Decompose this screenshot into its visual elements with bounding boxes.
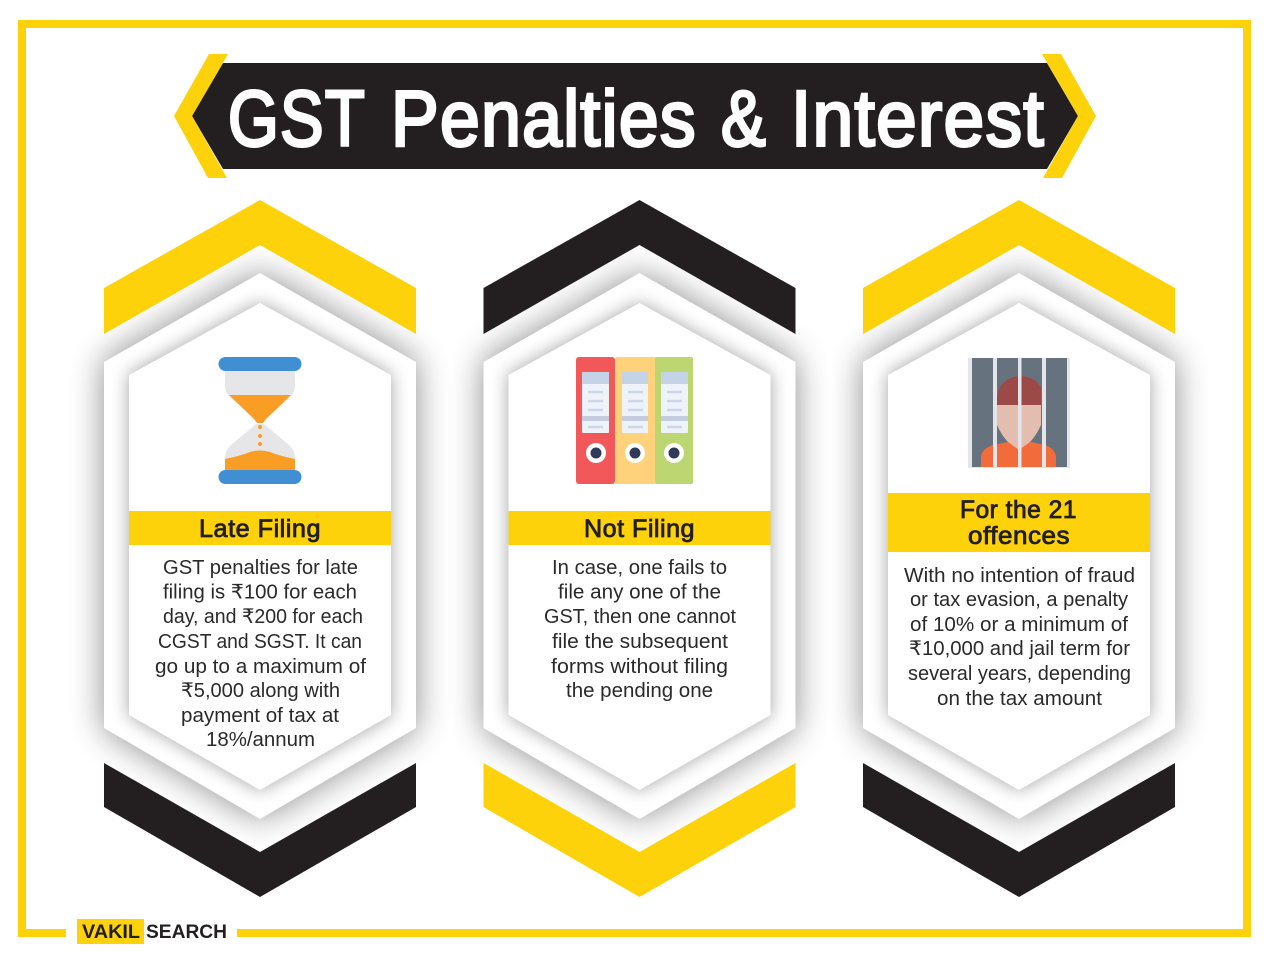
text block: on the tax amount — [937, 688, 1102, 710]
text block: forms without filing — [551, 656, 728, 678]
title: GST — [228, 74, 366, 162]
icon: binders — [576, 357, 693, 484]
logo: vakil search: SEARCH — [146, 922, 227, 943]
text block: filing is ₹100 for each — [163, 582, 357, 604]
heading: For the 21 — [960, 496, 1077, 524]
heading band — [508, 511, 770, 545]
logo: vakil search: VAKIL — [82, 922, 140, 943]
text block: day, and ₹200 for each — [163, 606, 363, 628]
panel: 21 offences — [863, 200, 1175, 897]
text block: payment of tax at — [181, 705, 339, 727]
title banner — [174, 54, 1096, 178]
heading band — [129, 511, 391, 545]
text block: GST penalties for late — [163, 557, 358, 579]
heading: Not Filing — [584, 515, 695, 543]
text block: several years, depending — [908, 663, 1131, 685]
text block: the pending one — [566, 680, 713, 702]
icon: hourglass — [218, 357, 302, 484]
logo: vakil search — [77, 919, 227, 944]
text block: file any one of the — [558, 582, 721, 604]
icon: prisoner behind bars — [968, 358, 1070, 468]
text block — [155, 557, 366, 751]
text block — [904, 565, 1135, 710]
title: Interest — [791, 74, 1045, 162]
heading band: offences — [968, 522, 1070, 550]
title: Penalties — [391, 74, 697, 162]
text block: CGST and SGST. It can — [158, 631, 362, 653]
text block: In case, one fails to — [552, 557, 727, 579]
heading: Late Filing — [199, 515, 321, 543]
text block: of 10% or a minimum of — [910, 614, 1128, 636]
heading band — [888, 493, 1150, 552]
text block: GST, then one cannot — [544, 606, 736, 628]
title — [228, 74, 1045, 162]
panel: not filing — [484, 200, 796, 897]
text block: 18%/annum — [206, 729, 315, 751]
text block: or tax evasion, a penalty — [910, 589, 1128, 611]
title: & — [721, 74, 767, 162]
text block — [544, 557, 736, 702]
panel: late filing — [104, 200, 416, 897]
text block: file the subsequent — [552, 631, 728, 653]
text block: ₹10,000 and jail term for — [909, 638, 1130, 660]
text block: ₹5,000 along with — [181, 680, 340, 702]
text block: With no intention of fraud — [904, 565, 1135, 587]
text block: go up to a maximum of — [155, 656, 366, 678]
